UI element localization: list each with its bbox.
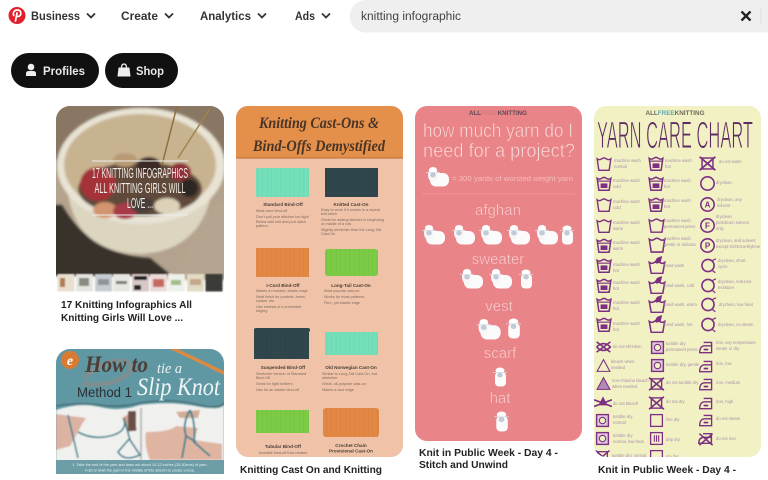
corner ribbon bbox=[170, 349, 224, 375]
column 2 labels: gentle or delicate bbox=[664, 242, 697, 247]
column 3 labels: dryclean, and solvent bbox=[716, 238, 756, 243]
row: sweater: sweater bbox=[472, 251, 524, 268]
pin: knitting cast-ons and bind-offs bbox=[236, 106, 403, 476]
pin: how to tie a slip knot bbox=[56, 349, 224, 474]
text row 2: I-Cord Bind-Off bbox=[266, 283, 300, 288]
column 1 labels: hot bbox=[613, 268, 620, 273]
column 3 symbols: F bbox=[705, 222, 710, 230]
text row 1: or middle of a row bbox=[321, 222, 351, 226]
column 1 labels: normal, low heat bbox=[613, 439, 645, 444]
column 3 labels: iron, any temperature bbox=[716, 340, 756, 345]
column 2 labels: line dry bbox=[666, 417, 680, 422]
row: vest bbox=[476, 298, 521, 339]
column 2 labels: hand wash bbox=[664, 263, 685, 268]
column 3 labels bbox=[716, 159, 761, 441]
text row 2: Neat finish for pockets, hems, bbox=[256, 295, 306, 299]
column 1 labels: hot bbox=[613, 286, 620, 291]
button: Profiles: Profiles bbox=[43, 66, 85, 78]
column 1 labels: machine wash bbox=[613, 199, 640, 204]
text row 3: Makes a nice edge bbox=[322, 388, 354, 392]
column 1 labels: machine wash bbox=[613, 240, 640, 245]
heading: how to tie a slip knot: How to bbox=[84, 352, 148, 377]
column 1 labels: do not bleach bbox=[613, 401, 639, 406]
row: afghan: afghan bbox=[475, 202, 521, 219]
column 2 labels: machine wash bbox=[664, 178, 691, 183]
text row 3: Old Norwegian Cast-On bbox=[325, 365, 377, 370]
column 1 labels: machine wash bbox=[613, 262, 640, 267]
heading: need for a project? bbox=[423, 141, 575, 162]
row: vest: vest bbox=[485, 298, 514, 315]
button: Profiles bbox=[11, 53, 99, 88]
text row 3: Great, all-purpose cast-on bbox=[322, 382, 366, 386]
column 3 labels: dryclean bbox=[716, 214, 732, 219]
heading: how to tie a slip knot: tie a bbox=[157, 361, 182, 377]
column 3 labels: dryclean, short bbox=[718, 258, 746, 263]
column 1 labels: non-chlorine bleach bbox=[612, 378, 649, 383]
column 3 labels: do not steam bbox=[716, 416, 741, 421]
infographic panel bbox=[415, 106, 582, 441]
row: sweater bbox=[460, 251, 533, 288]
column 1 labels bbox=[611, 158, 649, 458]
row: afghan bbox=[422, 202, 574, 244]
column 3 symbols bbox=[699, 157, 716, 445]
swatches row 4 bbox=[256, 408, 379, 437]
column 3 labels: only bbox=[716, 226, 725, 231]
text row 2: Makes a rounded, elastic edge bbox=[256, 289, 308, 293]
text row 1 bbox=[256, 202, 384, 236]
text row 4: Provisional Cast-On bbox=[329, 448, 373, 454]
row: hat bbox=[490, 390, 511, 431]
column 3 labels: dryclean, reduced bbox=[718, 279, 752, 284]
caption band: 1. Take the end of the yarn and draw out about 10-12 inches (25-30cms) of yarn. bbox=[72, 463, 208, 467]
brand logo: ALLFREEKNITTING bbox=[646, 110, 704, 117]
column 1 labels: do not shrinken bbox=[613, 344, 642, 349]
column 2 labels: do not tumble dry bbox=[666, 380, 699, 385]
column 1 labels: normal bbox=[614, 164, 627, 169]
column 2 labels: hot bbox=[665, 164, 672, 169]
icon: pinterest logo bbox=[8, 7, 26, 24]
text row 1: Easy to work if it comes in a repeat bbox=[321, 208, 381, 212]
text row 3: Bind-Off bbox=[256, 376, 271, 380]
column 3 labels: steam or dry bbox=[716, 346, 740, 351]
menu: Business: Business bbox=[31, 9, 80, 23]
menu: Create: Create bbox=[121, 9, 158, 23]
photos of hands with yarn bbox=[56, 401, 224, 462]
legend: one sheep equals 300 yards: = 300 yards of worsted weight yarn bbox=[452, 176, 573, 183]
menu: Ads: Ads bbox=[295, 9, 315, 23]
column 3 labels: iron, medium bbox=[716, 380, 741, 385]
column 1 labels: cold bbox=[613, 184, 621, 189]
text row 1: Knitted Cast-On bbox=[334, 202, 369, 207]
text row 3: Suspended Bind-Off bbox=[261, 365, 306, 370]
text row 2: Firm, yet elastic edge bbox=[324, 301, 360, 305]
column 2 labels: machine wash bbox=[664, 198, 691, 203]
photo overlay title: LOVE ... bbox=[127, 195, 153, 212]
method label: Method 1 bbox=[77, 384, 132, 400]
column 3 labels: dryclean, any bbox=[717, 197, 743, 202]
column 1 labels: hot bbox=[613, 306, 620, 311]
column 1 labels: warm bbox=[613, 226, 624, 231]
column 1 symbols bbox=[594, 158, 612, 462]
button: Shop bbox=[105, 53, 178, 88]
badge: e logo: e bbox=[67, 354, 73, 369]
text row 3: Great for tight knitters bbox=[256, 382, 293, 386]
row: scarf bbox=[484, 345, 517, 386]
column 2 labels: do not dry bbox=[666, 399, 686, 404]
text row 1: Most used bind-off bbox=[256, 209, 288, 213]
thumbnail strip bbox=[58, 274, 222, 292]
column 3 symbols: P bbox=[705, 242, 711, 250]
legend: one sheep equals 300 yards bbox=[426, 167, 573, 186]
pin: 17 knitting infographics bbox=[50, 100, 230, 324]
text row 2 bbox=[256, 283, 371, 313]
text row 1: pattern bbox=[256, 224, 268, 228]
text row 2: Works for most patterns bbox=[324, 295, 364, 299]
menu: Ads bbox=[295, 9, 330, 23]
photo: yarn in basket bbox=[50, 100, 230, 280]
column 1 labels: when needed bbox=[612, 384, 638, 389]
menu: Analytics: Analytics bbox=[200, 9, 251, 23]
column 2 labels: hand wash, hot bbox=[664, 322, 693, 327]
column 1 labels: cold bbox=[613, 205, 621, 210]
text row 2: Long-Tail Cast-On bbox=[331, 283, 371, 288]
column 2 labels: machine wash bbox=[664, 218, 691, 223]
column 3 labels: do not iron bbox=[716, 436, 736, 441]
text row 1: Don't pull your stitches too tight bbox=[256, 215, 310, 219]
scribble behind heading bbox=[82, 360, 131, 385]
swatches row 2 bbox=[256, 248, 378, 277]
badge: e logo bbox=[61, 351, 79, 369]
infographic panel bbox=[236, 106, 403, 457]
search box bbox=[350, 0, 768, 32]
photo: yarn in basket: ALL KNITTING GIRLS WILL bbox=[94, 180, 186, 197]
row: scarf: scarf bbox=[484, 345, 517, 362]
text row 2: collars, etc. bbox=[256, 299, 275, 303]
pin: yarn care chart bbox=[594, 106, 761, 476]
column 1 labels: machine wash bbox=[613, 300, 640, 305]
text row 3: Stretchier version of Standard bbox=[256, 372, 306, 376]
text row 3: Similar to Long-Tail Cast-On, but bbox=[322, 372, 378, 376]
pin title bbox=[419, 447, 558, 471]
column 3 labels: moisture bbox=[718, 285, 735, 290]
column 3 labels: except trichloroethylene bbox=[716, 244, 761, 249]
column 1 labels: bleach when bbox=[611, 359, 635, 364]
header band: Knitting Cast-Ons & bbox=[258, 115, 379, 132]
button: Shop: Shop bbox=[136, 66, 164, 78]
header band bbox=[236, 106, 403, 158]
column 2 symbols bbox=[649, 157, 665, 462]
text row 3: Use for an elastic bind-off bbox=[256, 388, 300, 392]
column 3 labels: cycle bbox=[718, 264, 728, 269]
column 2 labels: permanent press bbox=[666, 347, 697, 352]
pin title: Knitting Cast On and Knitting bbox=[240, 464, 382, 476]
pin title: Knitting Girls Will Love ... bbox=[61, 312, 183, 324]
column 2 labels: tumble dry bbox=[666, 341, 686, 346]
column 1 labels: hot bbox=[613, 327, 620, 332]
column 2 labels: machine wash bbox=[664, 236, 691, 241]
column 2 labels: hand wash, cold bbox=[664, 283, 695, 288]
column 3 symbols: A bbox=[705, 200, 711, 210]
header band: Bind-Offs Demystified bbox=[252, 138, 386, 155]
text row 4: Crochet Chain bbox=[335, 443, 367, 448]
column 2 labels: dry flat bbox=[666, 454, 679, 459]
column 1 labels: machine wash bbox=[613, 280, 640, 285]
caption band bbox=[56, 460, 224, 474]
heading: how much yarn do I bbox=[423, 121, 573, 142]
text row 2: edging bbox=[256, 309, 267, 313]
column 3 labels: iron, low bbox=[716, 361, 733, 366]
text row 1: knit stitch bbox=[321, 212, 337, 216]
column 1 labels: machine wash bbox=[613, 321, 640, 326]
column 3 labels: do not wash bbox=[719, 159, 742, 164]
column 3 labels: dryclean bbox=[716, 180, 732, 185]
column 1 labels: normal bbox=[613, 420, 626, 425]
column 3 labels: petroleum solvent bbox=[716, 220, 750, 225]
column 2 labels: hot bbox=[664, 184, 671, 189]
column 2 labels: hand wash, warm bbox=[664, 302, 697, 307]
column 1 labels: machine wash bbox=[613, 220, 640, 225]
heading bbox=[423, 121, 575, 162]
text row 2: Most popular cast-on bbox=[324, 289, 359, 293]
row: hat: hat bbox=[490, 390, 511, 407]
text row 1: Cast-On bbox=[321, 232, 335, 236]
heading: how to tie a slip knot: Slip Knot bbox=[137, 374, 221, 401]
column 1 labels: tumble dry bbox=[613, 433, 633, 438]
text row 3: stretchier bbox=[322, 376, 338, 380]
column 2 labels: tumble dry, gentle bbox=[666, 362, 700, 367]
column 3 labels: dryclean, no steam bbox=[718, 322, 754, 327]
column 2 labels: drip dry bbox=[666, 437, 681, 442]
photo overlay title: INFOGRAPHICS bbox=[127, 221, 154, 225]
photo: yarn in basket: 17 KNITTING INFOGRAPHICS bbox=[92, 165, 188, 182]
pin title: Knit in Public Week - Day 4 - bbox=[419, 447, 558, 459]
text row 4: Tubular Bind-Off bbox=[265, 444, 302, 449]
swatches row 3 bbox=[254, 328, 378, 359]
column 3 labels: solvent bbox=[717, 203, 731, 208]
infographic panel bbox=[594, 106, 761, 462]
pin title bbox=[61, 299, 192, 324]
caption band: Fold or twist the yarn in the middle of this stretch to create a loop. bbox=[85, 468, 195, 472]
text row 3 bbox=[256, 365, 378, 392]
column 2 labels: permanent press bbox=[664, 224, 695, 229]
column 3 labels: iron, high bbox=[716, 399, 734, 404]
pin title: Stitch and Unwind bbox=[419, 459, 508, 471]
column 1 labels: machine wash bbox=[613, 178, 640, 183]
pin title: Knit in Public Week - Day 4 - bbox=[598, 464, 736, 476]
text row 1: Slightly stretchier than the Long-Tail bbox=[321, 228, 381, 232]
text row 4: Invisible bind-off that creates bbox=[259, 451, 307, 455]
brand logo: ALLFREEKNITTING bbox=[469, 110, 527, 117]
column 1 labels: machine wash bbox=[614, 158, 641, 163]
heading: how to tie a slip knot bbox=[84, 356, 220, 400]
swatches row 1 bbox=[256, 168, 378, 197]
pin title: 17 Knitting Infographics All bbox=[61, 299, 192, 311]
search box: knitting infographic bbox=[361, 11, 461, 23]
text row 1: Standard Bind-Off bbox=[263, 202, 303, 207]
column 2 labels: machine wash bbox=[665, 158, 692, 163]
column 2 labels: hot bbox=[664, 204, 671, 209]
text row 1: Below with knit and purl stitch bbox=[256, 220, 306, 224]
text row 4 bbox=[259, 444, 373, 454]
column 1 labels: warm bbox=[613, 246, 624, 251]
column 1 labels: needed bbox=[611, 365, 626, 370]
column 3 labels: dryclean, low heat bbox=[719, 302, 754, 307]
text row 1: Great for adding stitches in beginning bbox=[321, 218, 384, 222]
pin: how much yarn bbox=[415, 106, 582, 471]
photo overlay title bbox=[92, 161, 188, 225]
column 2 labels bbox=[664, 158, 700, 459]
column 1 labels: tumble dry, normal bbox=[612, 453, 646, 458]
column 1 labels: tumble dry bbox=[613, 414, 633, 419]
top navigation bar bbox=[8, 0, 768, 32]
text row 2: Use instead of a crocheted bbox=[256, 305, 301, 309]
